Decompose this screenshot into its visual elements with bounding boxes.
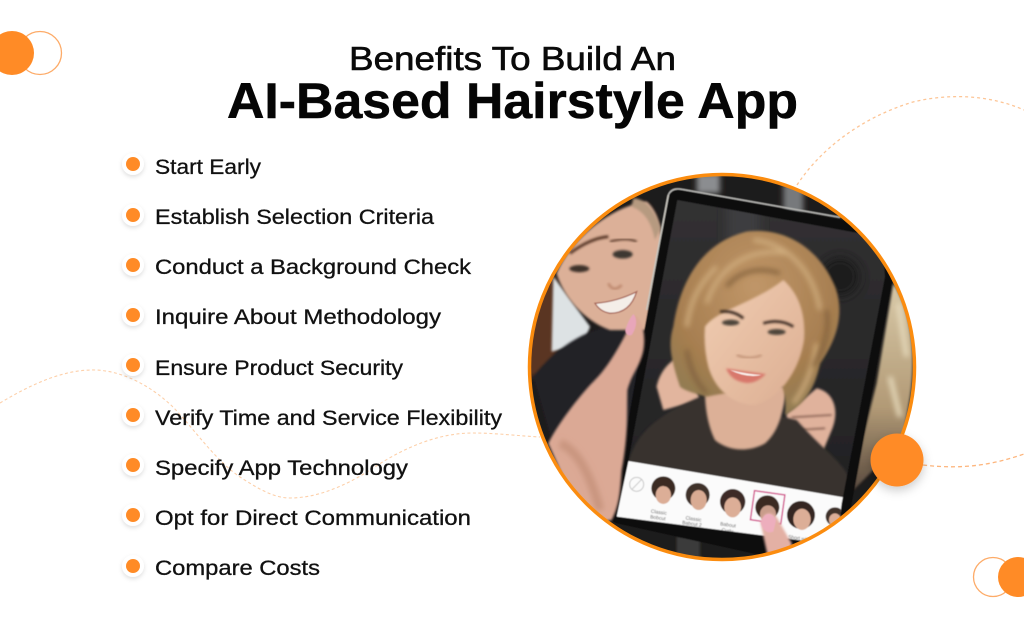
thumbnail 5 (787, 501, 815, 530)
subject face (705, 280, 804, 405)
item 8: Opt for Direct Communication (155, 507, 471, 530)
subject hair (671, 231, 839, 415)
subject hands (657, 357, 835, 450)
hand holding tablet (548, 314, 644, 523)
item 9: Compare Costs (155, 557, 320, 580)
decorative circles top left (0, 31, 62, 75)
thumbnail 6 (825, 506, 842, 525)
dashed curve left wave (0, 370, 540, 498)
thumbnail captions: Bobcut (650, 514, 667, 523)
checklist (122, 153, 503, 580)
thumbnail 1 (651, 476, 675, 504)
item 4: Inquire About Methodology (155, 306, 442, 329)
tablet body (611, 189, 893, 557)
thumbnail captions: Curly (721, 527, 734, 535)
tablet screen (613, 197, 890, 550)
decorative circles bottom right (974, 557, 1024, 597)
item 1 (122, 153, 262, 179)
thumbnail captions: Short with (788, 534, 811, 543)
no-style icon (630, 477, 644, 491)
orange accent dot on photo (870, 434, 924, 486)
thumbnail captions: Classic (650, 509, 668, 517)
item 2: Establish Selection Criteria (155, 206, 434, 229)
blonde woman at right (853, 283, 913, 490)
thumbnail captions: Classic (685, 515, 702, 524)
subject shirt (627, 397, 848, 503)
photo background (527, 170, 920, 567)
title (227, 40, 798, 129)
thumbnail captions: Babout (720, 521, 737, 530)
circular photo: tablet with hairstyle app (527, 170, 920, 567)
item 6: Verify Time and Service Flexibility (155, 407, 503, 430)
selection strip (616, 460, 844, 542)
thumbnail 4 selected (750, 491, 785, 524)
item 7 (122, 454, 409, 480)
thumbnail 3 (720, 489, 745, 517)
title line 2: AI-Based Hairstyle App (227, 73, 798, 129)
tapping finger (761, 513, 792, 558)
woman behind tablet (533, 198, 670, 447)
thumbnail captions: Babcut 2 (682, 520, 702, 529)
title line 1: Benefits To Build An (349, 40, 676, 77)
item 1: Start Early (155, 156, 262, 179)
item 7: Specify App Technology (155, 457, 409, 480)
thumbnail captions (650, 509, 811, 543)
dashed curve right top (797, 97, 1024, 185)
circular photo border (530, 174, 914, 560)
subject neck (705, 387, 787, 449)
thumbnail 2 (686, 483, 710, 510)
item 3: Conduct a Background Check (155, 256, 472, 279)
dashed curve right bottom (923, 454, 1024, 467)
item 9 (122, 555, 320, 580)
item 5: Ensure Product Security (155, 357, 404, 380)
